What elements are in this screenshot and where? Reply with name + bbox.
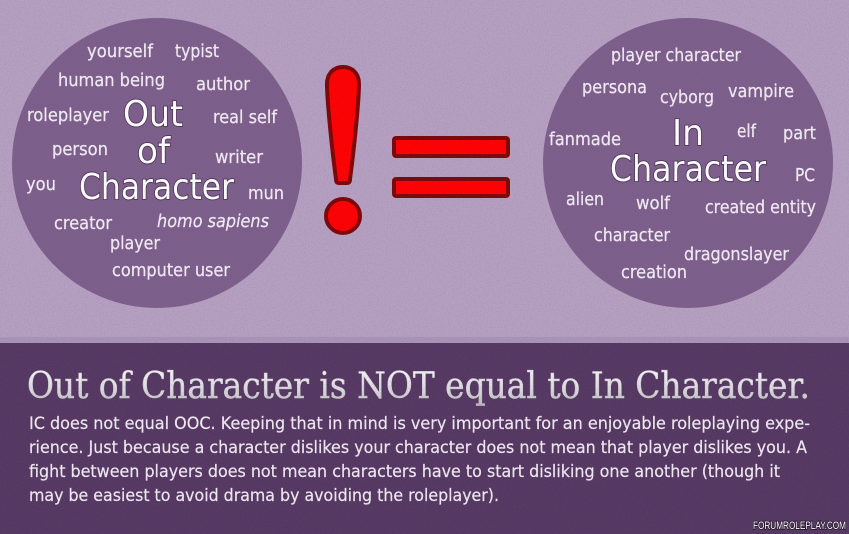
body line 4: may be easiest to avoid drama by avoiding the roleplayer). (29, 486, 499, 506)
word: player character: player character (611, 45, 742, 66)
equals top bar (394, 138, 508, 156)
heading word: In: In (672, 113, 704, 154)
word: human being: human being (58, 70, 165, 91)
word: fanmade: fanmade (549, 129, 621, 150)
word: homo sapiens: homo sapiens (157, 211, 269, 232)
circle: out of character (12, 18, 302, 308)
word: vampire: vampire (728, 81, 794, 102)
word: cyborg: cyborg (660, 87, 714, 108)
word: PC: PC (795, 165, 815, 186)
word: mun: mun (248, 183, 284, 204)
word: typist: typist (175, 41, 219, 62)
word: dragonslayer: dragonslayer (684, 244, 790, 265)
word: elf: elf (737, 121, 757, 142)
exclamation dot (326, 199, 360, 233)
word: real self: real self (213, 107, 278, 128)
word: character: character (594, 225, 671, 246)
panel: out of character word cloud (12, 18, 302, 308)
word: alien: alien (566, 189, 604, 210)
word: yourself: yourself (87, 41, 154, 62)
heading word: Out: Out (123, 94, 183, 135)
panel: bottom explanation band (0, 343, 849, 534)
heading: Out of Character (79, 94, 234, 208)
word: part: part (783, 123, 816, 144)
word: author: author (196, 74, 251, 95)
icon: red equals sign (394, 138, 508, 196)
word: created entity: created entity (705, 197, 816, 218)
word: roleplayer: roleplayer (27, 105, 110, 126)
body line 1: IC does not equal OOC. Keeping that in mind is very important for an enjoyable roleplaying expe- (29, 414, 810, 434)
heading word: Character: Character (79, 167, 234, 208)
band background (0, 343, 849, 534)
circle: in character (543, 18, 833, 308)
body line 2: rience. Just because a character dislikes your character does not mean that player dislikes you. A (29, 438, 807, 458)
decorative strip above the band (0, 337, 849, 343)
heading word: Character: Character (610, 149, 766, 190)
word: person: person (52, 139, 108, 160)
icon: red exclamation mark (326, 67, 360, 233)
panel: in character word cloud (543, 18, 833, 308)
word: you: you (26, 174, 56, 195)
word: player: player (110, 233, 161, 254)
word: computer user: computer user (112, 260, 231, 281)
word: writer: writer (215, 147, 264, 168)
word: wolf: wolf (636, 193, 671, 214)
heading word: of: of (137, 131, 171, 172)
heading: In Character (610, 113, 766, 190)
body line 3: fight between players does not mean characters have to start disliking one another (though it (29, 462, 780, 482)
exclamation stem (327, 67, 359, 183)
word: creation: creation (621, 262, 687, 283)
equals bottom bar (394, 179, 508, 196)
word: persona: persona (582, 77, 647, 98)
word: creator: creator (54, 213, 113, 234)
body text paragraph (29, 414, 810, 506)
